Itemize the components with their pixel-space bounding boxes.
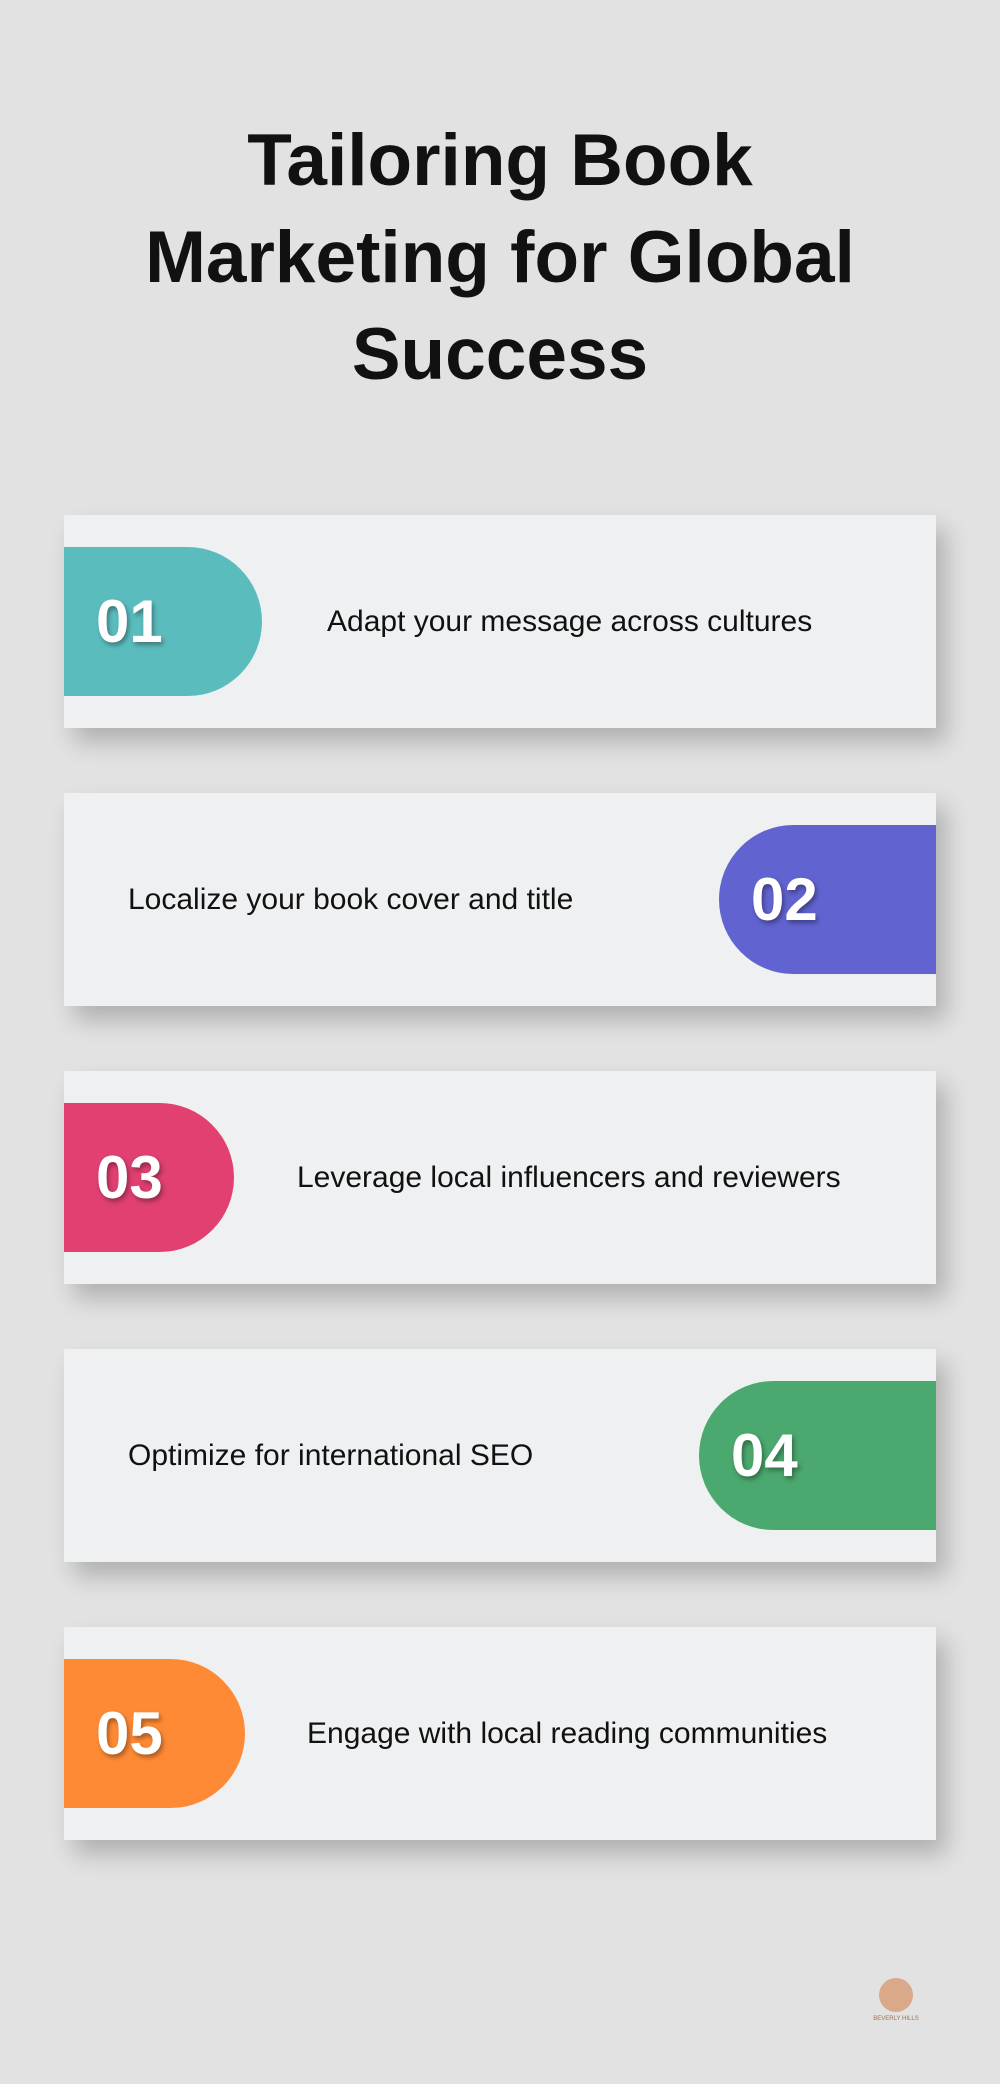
pill 02: 02 [751, 866, 818, 933]
pill 02 [719, 825, 936, 974]
pill 01 [64, 547, 262, 696]
logo [873, 1978, 919, 2022]
text 3: Leverage local influencers and reviewers [297, 1161, 841, 1194]
title: Success [352, 314, 648, 395]
pill 04 [699, 1381, 936, 1530]
pill 05: 05 [96, 1700, 163, 1767]
pill 03 [64, 1103, 234, 1252]
text 2: Localize your book cover and title [128, 883, 573, 916]
text 5: Engage with local reading communities [307, 1717, 827, 1750]
card 3 [64, 1071, 936, 1284]
title [145, 120, 855, 395]
pill 04: 04 [731, 1422, 798, 1489]
text 1: Adapt your message across cultures [327, 605, 812, 638]
pill 01: 01 [96, 588, 163, 655]
card 5 [64, 1627, 936, 1840]
card 2 [64, 793, 936, 1006]
pill 05 [64, 1659, 245, 1808]
title: Tailoring Book [247, 120, 753, 201]
card 1 [64, 515, 936, 728]
text 4: Optimize for international SEO [128, 1439, 533, 1472]
logo: BEVERLY HILLS [873, 2016, 919, 2022]
card 4 [64, 1349, 936, 1562]
pill 03: 03 [96, 1144, 163, 1211]
title: Marketing for Global [145, 217, 855, 298]
